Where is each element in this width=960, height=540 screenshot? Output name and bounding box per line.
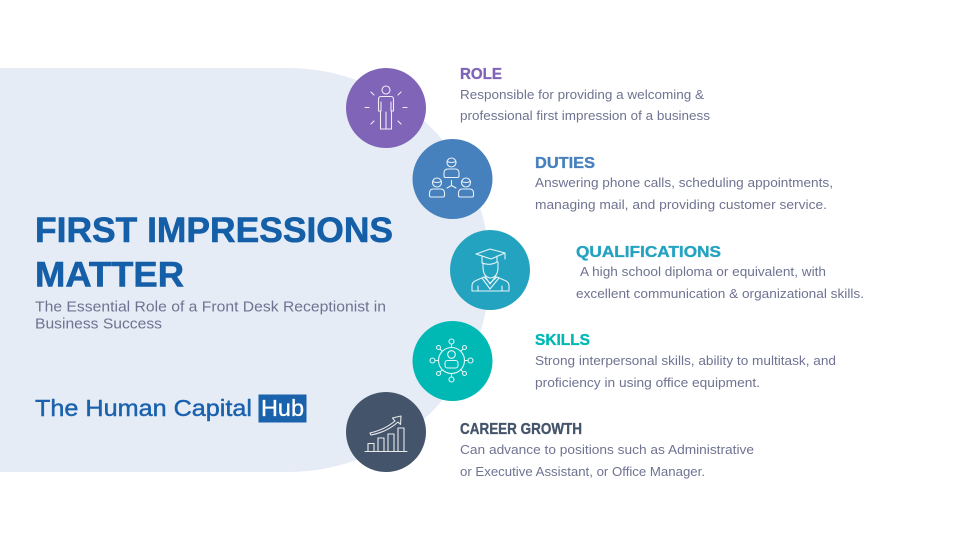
panel: career growth [346,392,754,479]
title: MATTER [35,256,184,294]
panel: role [346,66,710,148]
text: duties description: managing mail, and providing customer service. [535,198,827,212]
text: career growth description: Can advance to positions such as Administrative [460,443,754,457]
logo: The Human Capital Hub [35,394,306,422]
subtitle: The Essential Role of a Front Desk Receptionist in [35,298,386,316]
text: skills description: Strong interpersonal skills, ability to multitask, and [535,354,836,368]
text: career growth description [460,443,754,479]
heading: role: ROLE [460,66,502,83]
text: duties description [535,176,833,212]
panel: qualifications [450,230,864,310]
title [35,211,393,294]
icon: person in skill network [412,321,492,401]
text: duties description: Answering phone calls, scheduling appointments, [535,176,833,190]
icon: team of three people [412,139,492,219]
icon: graduate [450,230,530,310]
icon: person radiating arrows [346,68,426,148]
text: career growth description: or Executive Assistant, or Office Manager. [460,465,705,479]
heading: duties: DUTIES [535,155,595,172]
text: skills description: proficiency in using office equipment. [535,376,760,390]
heading: skills: SKILLS [535,332,590,349]
subtitle [35,298,386,332]
logo: The Human Capital Hub: The Human Capital [35,395,252,421]
heading: career growth: CAREER GROWTH [460,421,582,438]
heading: qualifications: QUALIFICATIONS [576,244,721,261]
text: qualifications description: A high school diploma or equivalent, with [580,265,826,279]
text: role description [460,88,710,123]
background panel [0,68,490,472]
text: role description: professional first impression of a business [460,109,710,123]
text: qualifications description [576,265,864,301]
logo: The Human Capital Hub: Hub [261,395,304,421]
subtitle: Business Success [35,316,162,332]
text: skills description [535,354,836,390]
panel: skills [412,321,836,401]
title: FIRST IMPRESSIONS [35,211,393,250]
text: qualifications description: excellent communication & organizational skills. [576,287,864,301]
icon: rising bar chart with arrow [346,392,426,472]
text: role description: Responsible for providing a welcoming & [460,88,705,102]
panel: duties [412,139,833,219]
